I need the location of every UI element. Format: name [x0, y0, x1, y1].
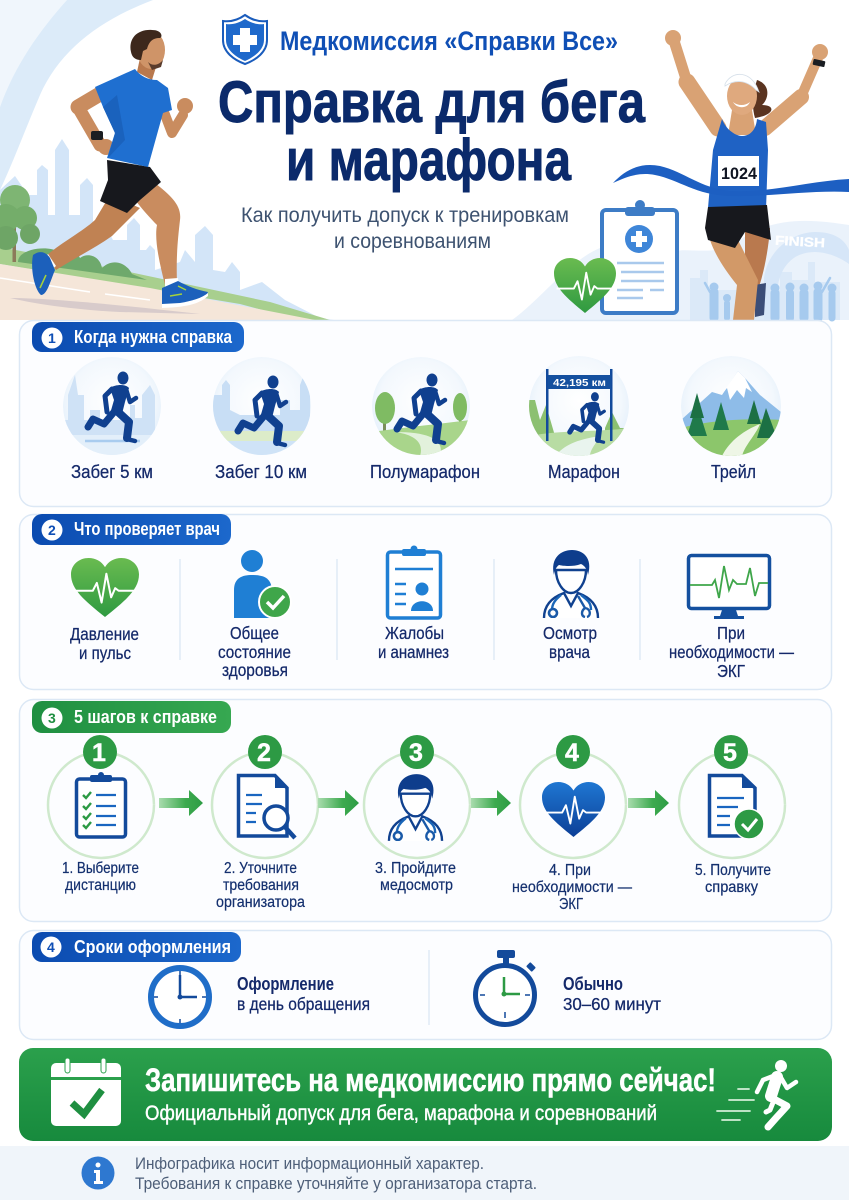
- heading badge 3: [32, 701, 231, 733]
- call to action text: Официальный допуск для бега, марафона и соревнований: [145, 1102, 657, 1125]
- step label 2: организатора: [216, 894, 305, 911]
- footer note: [0, 1146, 849, 1200]
- title: и марафона: [286, 128, 572, 193]
- time text 1: Оформление: [237, 974, 334, 994]
- step label 1: дистанцию: [65, 877, 136, 894]
- icon: checklist: [76, 772, 126, 837]
- label: ECG: [669, 623, 794, 681]
- label: ECG: При: [717, 623, 745, 643]
- step label 3: 3. Пройдите: [375, 860, 456, 877]
- label: ECG: ЭКГ: [717, 661, 745, 681]
- panel: when a certificate is needed: [20, 320, 832, 506]
- step label 2: 2. Уточните: [224, 860, 297, 877]
- crowd silhouettes: [705, 278, 836, 318]
- label: 5 km: Забег 5 км: [71, 461, 153, 482]
- decorative arc top-left: [0, 0, 67, 107]
- step label 1: [62, 860, 139, 894]
- label: examination: [543, 623, 597, 662]
- icon: clock: [151, 968, 209, 1026]
- label: pressure: Давление: [70, 624, 139, 644]
- panel: what the doctor checks: [20, 514, 832, 690]
- step label 3: медосмотр: [380, 877, 453, 894]
- heading badge 4: [32, 932, 241, 962]
- label: general health: здоровья: [222, 660, 288, 680]
- arrow: [628, 790, 669, 816]
- green verge: [0, 247, 330, 320]
- label: marathon: Марафон: [548, 461, 620, 482]
- icon: 10 km: [213, 357, 311, 456]
- tree: [0, 185, 40, 262]
- icon: person with check: [234, 550, 291, 618]
- heading badge 3: 5 шагов к справке: [74, 707, 217, 727]
- bushes: [18, 248, 147, 280]
- disclaimer text: Требования к справке уточняйте у организатора старта.: [135, 1175, 537, 1193]
- step label 1: 1. Выберите: [62, 860, 139, 877]
- distance sign: 42,195 км: [553, 377, 606, 389]
- icon: white runner: [717, 1060, 796, 1127]
- disclaimer text: Инфографика носит информационный характер.: [135, 1155, 484, 1173]
- icon: clipboard with patient: [388, 546, 440, 618]
- subtitle: Как получить допуск к тренировкам: [241, 204, 569, 227]
- title: Справка для бега: [218, 70, 646, 135]
- heading badge 4: Сроки оформления: [74, 937, 231, 957]
- label: general health: [218, 623, 291, 680]
- step label 5: справку: [705, 879, 758, 896]
- label: general health: Общее: [230, 623, 279, 643]
- label: half marathon: Полумарафон: [370, 461, 480, 482]
- subtitle: [241, 204, 569, 253]
- panel: processing time: [20, 930, 832, 1040]
- heading badge 4: 4: [47, 939, 55, 955]
- logo shield: [223, 15, 267, 64]
- heading badge 2: [32, 514, 231, 545]
- icon: doctor: [544, 550, 598, 618]
- heading badge 3: 3: [48, 710, 56, 726]
- heading badge 1: [32, 322, 244, 352]
- step label 3: [375, 860, 456, 894]
- label: pressure: [70, 624, 139, 663]
- label: 10 km: Забег 10 км: [215, 461, 307, 482]
- road: [0, 264, 315, 320]
- icon: 5 km: [63, 357, 161, 455]
- time text 1: [237, 974, 370, 1014]
- male runner: [32, 30, 208, 308]
- step label 2: [216, 860, 305, 911]
- label: ECG: необходимости —: [669, 642, 794, 662]
- icon: info: [82, 1156, 114, 1190]
- icon: heart: [71, 558, 139, 617]
- hero header: [0, 0, 849, 320]
- arrow: [159, 790, 203, 816]
- step label 4: [512, 862, 632, 913]
- icon: stopwatch: [476, 950, 536, 1024]
- label: examination: врача: [549, 642, 590, 662]
- step numbers: [83, 735, 748, 769]
- label: examination: Осмотр: [543, 623, 597, 643]
- step label 2: требования: [223, 877, 299, 894]
- label: complaints: Жалобы: [385, 623, 444, 643]
- subtitle: и соревнованиям: [334, 230, 491, 253]
- arc band: [0, 0, 153, 190]
- icon: trail: [681, 356, 781, 456]
- background hills right: [512, 221, 849, 320]
- step label 4: ЭКГ: [559, 896, 583, 913]
- label: trail: Трейл: [711, 461, 756, 482]
- call to action banner: [19, 1048, 832, 1141]
- icon: ECG monitor: [688, 556, 770, 619]
- step label 4: 4. При: [549, 862, 591, 879]
- heading badge 1: 1: [48, 330, 56, 346]
- step numbers: 2: [257, 739, 271, 767]
- panel: five steps: [20, 700, 832, 922]
- icon: half marathon: [372, 357, 470, 456]
- arrow: [471, 790, 511, 816]
- step label 4: необходимости —: [512, 879, 632, 896]
- time text 2: Обычно: [563, 974, 623, 994]
- step numbers: 3: [409, 739, 423, 767]
- green heart: [554, 258, 616, 313]
- icon: heart pulse: [542, 782, 605, 837]
- arrow: [318, 790, 359, 816]
- title: [218, 70, 646, 193]
- icon: doctor: [389, 774, 442, 841]
- heading badge 2: 2: [48, 522, 56, 538]
- label: complaints: и анамнез: [378, 642, 449, 662]
- call to action text: Запишитесь на медкомиссию прямо сейчас!: [145, 1062, 716, 1098]
- finish ribbon: [613, 165, 849, 196]
- label: pressure: и пульс: [79, 643, 131, 663]
- time text 2: 30–60 минут: [563, 994, 661, 1014]
- time text 2: [563, 974, 661, 1014]
- woman runner: [665, 30, 828, 320]
- step numbers: 1: [92, 739, 106, 767]
- step numbers: 5: [723, 739, 737, 767]
- heading badge 2: Что проверяет врач: [74, 519, 220, 539]
- city skyline left: [0, 139, 334, 320]
- icon: document with magnifier: [238, 775, 295, 838]
- clipboard illustration: [602, 200, 677, 313]
- step label 5: 5. Получите: [695, 862, 771, 879]
- disclaimer text: [135, 1155, 537, 1193]
- finish arch: [690, 232, 849, 320]
- call to action text: [145, 1062, 716, 1125]
- icon: document with check: [710, 775, 764, 839]
- finish arch: FINISH: [775, 233, 825, 250]
- icon: marathon: [529, 356, 630, 456]
- step label 5: [695, 862, 771, 896]
- icon: calendar: [51, 1058, 121, 1126]
- label: complaints: [378, 623, 449, 662]
- label: general health: состояние: [218, 642, 291, 662]
- step numbers: 4: [565, 739, 579, 767]
- brand name: Медкомиссия «Справки Все»: [280, 26, 618, 56]
- time text 1: в день обращения: [237, 994, 370, 1014]
- woman runner: 1024: [721, 164, 758, 183]
- heading badge 1: Когда нужна справка: [74, 327, 233, 347]
